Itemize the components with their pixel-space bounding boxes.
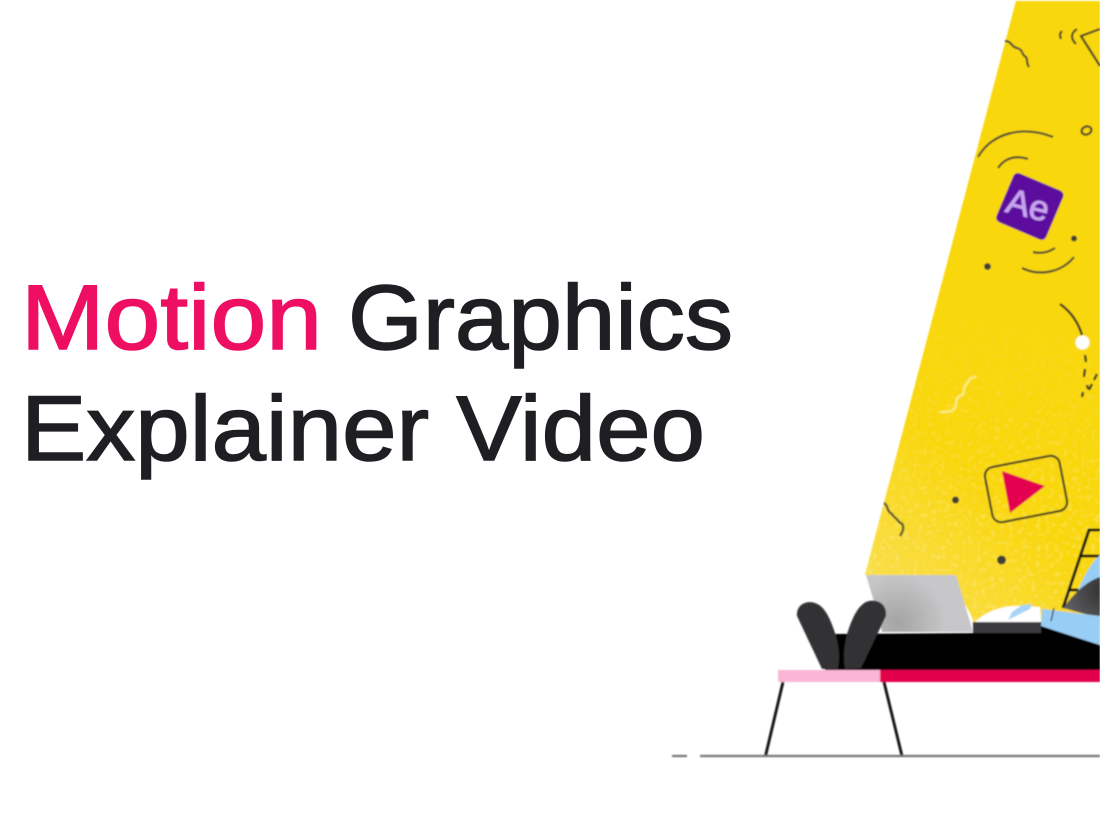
Ae label: Ae <box>1002 181 1053 230</box>
right foot <box>844 601 886 669</box>
title <box>21 267 733 480</box>
icon: After Effects badge <box>995 172 1065 241</box>
blue sleeve <box>1041 609 1100 645</box>
laptop screen <box>866 575 973 632</box>
title word: Graphics: Graphics <box>348 267 733 369</box>
title line 2: Explainer Video <box>21 378 705 480</box>
motion path with white dot <box>1060 304 1097 397</box>
squiggle bottom left <box>884 503 903 536</box>
white shirt patch <box>975 606 1041 622</box>
laptop base <box>973 622 1043 633</box>
yellow speckle texture <box>868 310 1100 621</box>
triangle outline and sound marks <box>1060 29 1100 66</box>
arcs above Ae icon <box>978 131 1053 168</box>
illustration: person with laptop under yellow beam <box>672 1 1100 756</box>
left foot <box>797 602 839 669</box>
dots <box>952 236 1077 564</box>
title word: Motion: Motion <box>21 267 322 369</box>
ladder frame <box>1063 530 1100 608</box>
bench legs <box>766 682 902 756</box>
yellow light beam <box>865 1 1100 625</box>
small circle <box>1080 125 1093 136</box>
person: black trousers body <box>825 626 1100 672</box>
person: blue shirt back <box>1078 555 1100 600</box>
bench red section <box>880 670 1100 682</box>
person: dark shadow torso <box>1063 577 1100 618</box>
shirt cuff blue <box>1008 604 1032 620</box>
icon: play button <box>983 454 1069 524</box>
arcs below Ae icon <box>1022 248 1074 272</box>
ground line <box>672 755 1100 757</box>
squiggle top left <box>1005 41 1029 67</box>
pale squiggle <box>940 377 976 412</box>
bench pink section <box>778 670 880 682</box>
